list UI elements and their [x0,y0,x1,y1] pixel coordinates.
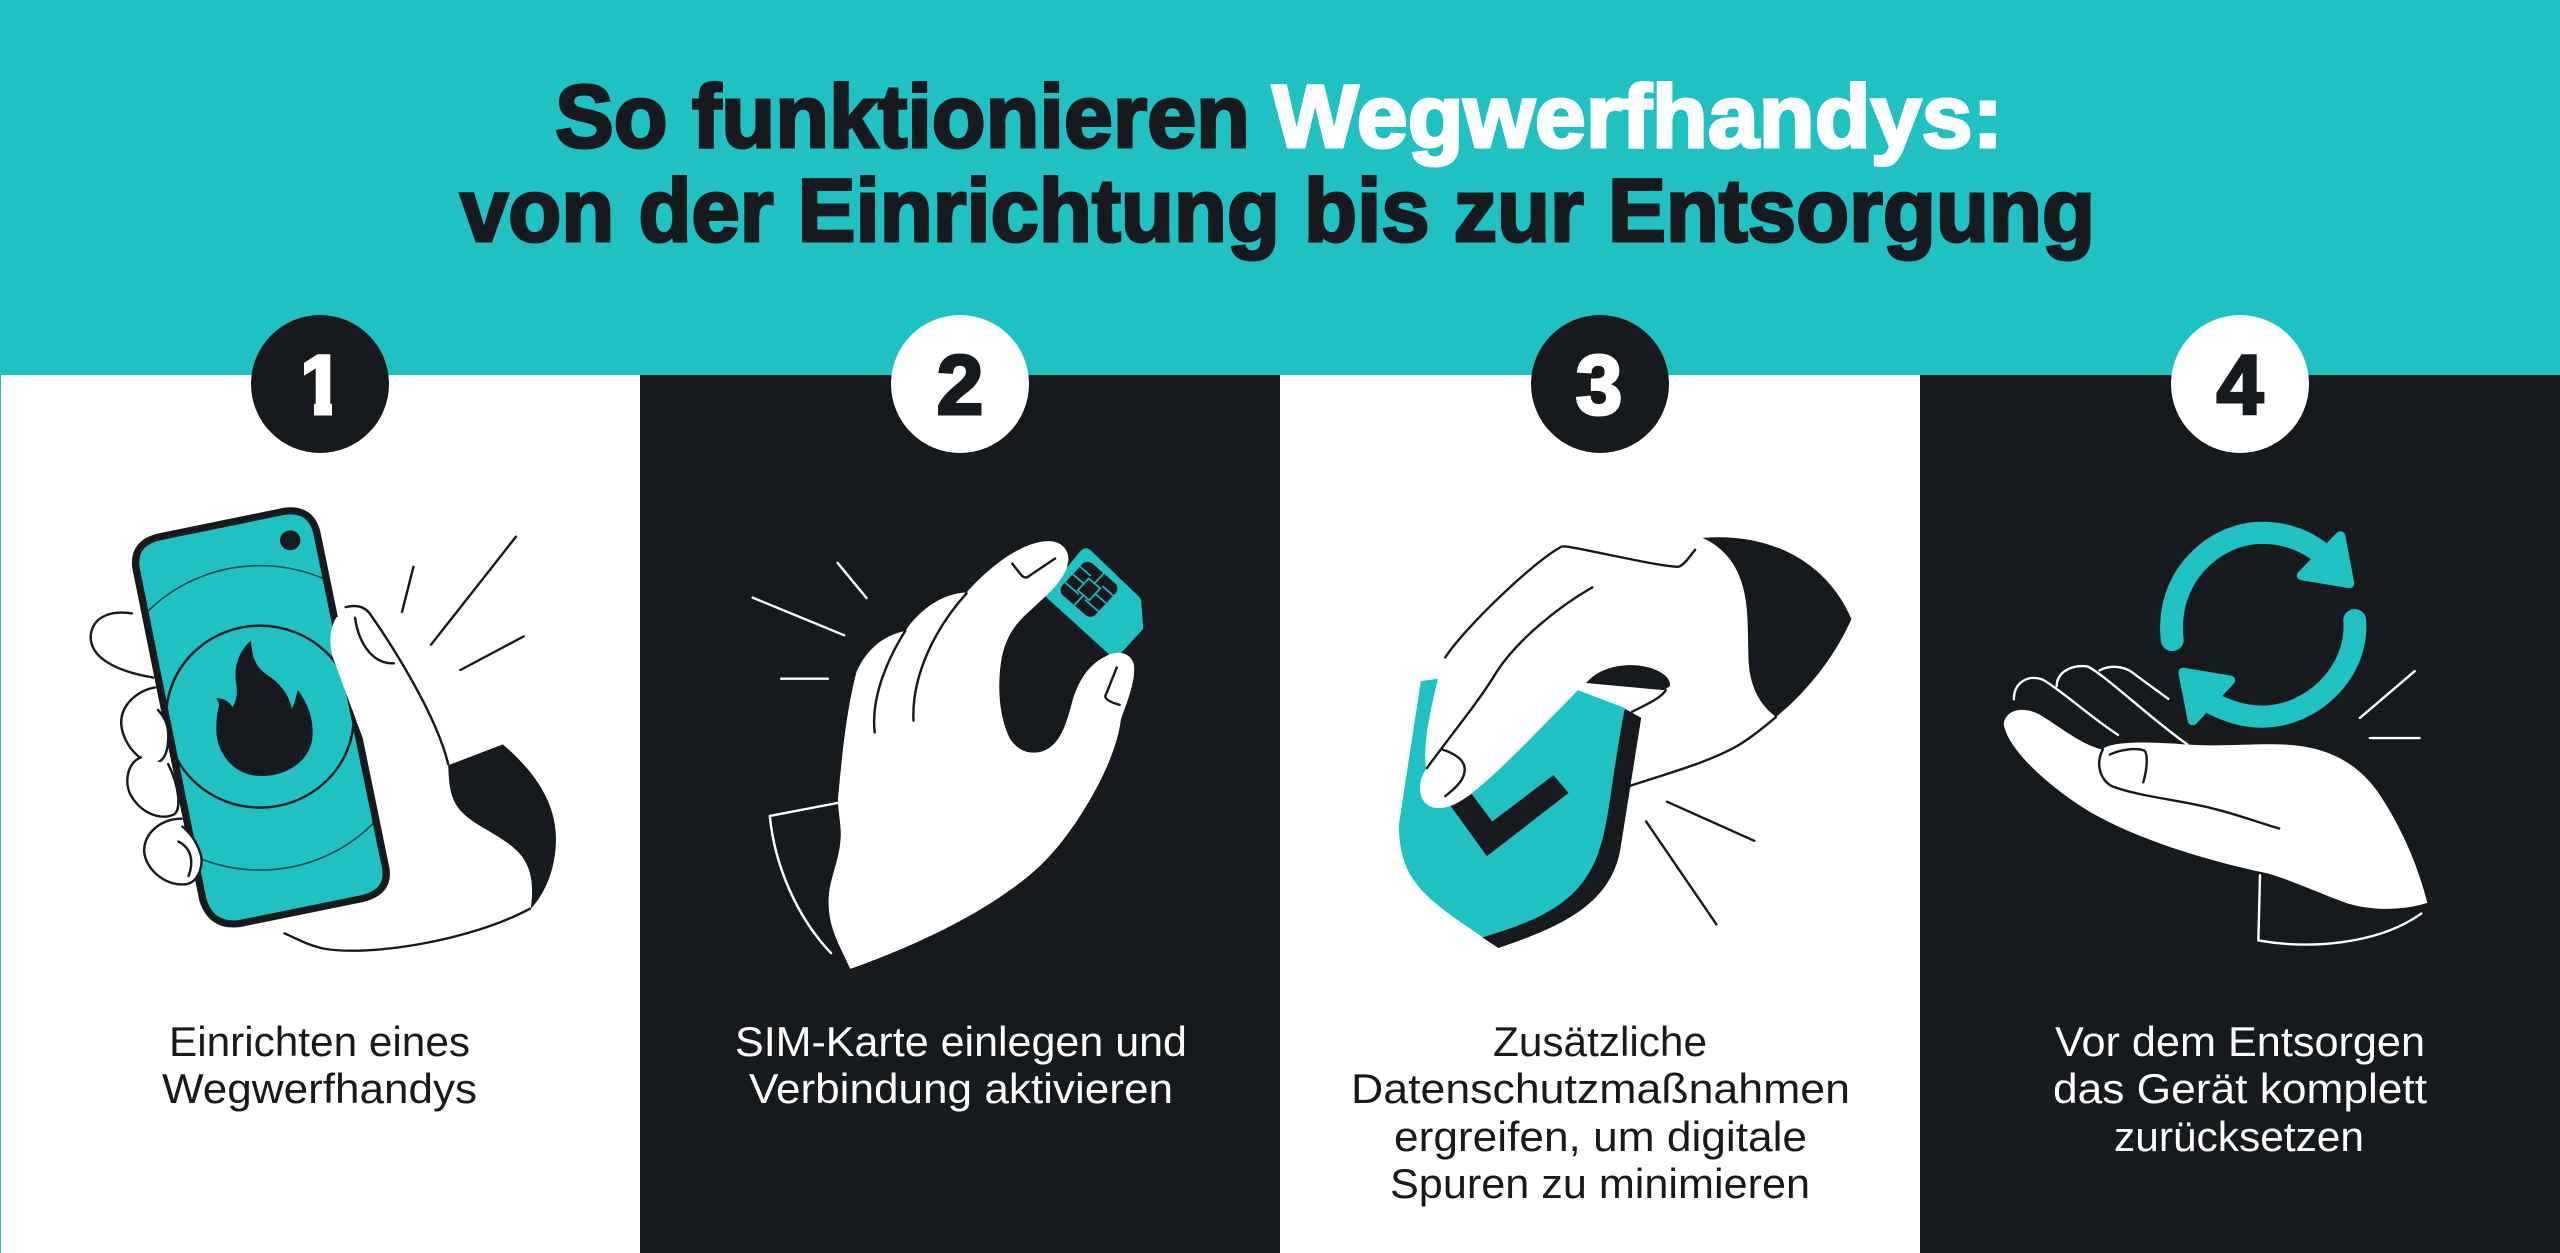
sleeve [448,744,556,909]
header band [0,0,2560,375]
caption 3: Zusätzliche [1493,1018,1707,1065]
hand [1420,546,1776,808]
caption 3: Datenschutzmaßnahmen [1351,1065,1850,1112]
illustration: hand holding phone with flame [91,511,556,951]
title: von der Einrichtung bis zur Entsorgung [460,160,2095,260]
caption 2: Verbindung aktivieren [749,1065,1173,1112]
action lines [1646,802,1754,924]
panel 2: insert SIM card [640,315,1280,1253]
caption 4: zurücksetzen [2114,1113,2364,1160]
fingers [2014,666,2187,744]
title: Wegwerfhandys: [1272,66,2003,166]
thumb lines [2099,749,2279,829]
panel 4: factory reset [1920,315,2560,1253]
illustration: hand with shield [1399,537,1851,948]
action lines [2360,671,2420,738]
sleeve [1702,537,1851,717]
SIM card [1044,548,1143,655]
step number 1: 1 [298,338,344,432]
step number 2 [891,315,1029,453]
title: So funktionieren [555,66,1250,166]
caption 3: ergreifen, um digitale [1394,1113,1807,1160]
step number 3: 3 [1576,338,1622,432]
shield [1399,679,1641,948]
caption 1: Wegwerfhandys [162,1065,477,1112]
illustration: hand with reset arrows [2004,533,2427,944]
panel 1: set up phone [0,315,556,1253]
caption 3 [1351,1018,1850,1207]
hand [2004,710,2427,909]
title [460,66,2095,260]
caption 4: Vor dem Entsorgen [2055,1018,2425,1065]
illustration: hand holding SIM card [753,541,1143,969]
step number 3 [1531,315,1669,453]
check mark [1451,775,1569,856]
hand [91,606,530,951]
step number 1 [251,315,389,453]
hand [829,541,1134,969]
caption 3: Spuren zu minimieren [1390,1160,1810,1207]
panel 3: privacy measures [1280,315,1920,1253]
finger lines [874,558,1120,732]
step number 4 [2171,315,2309,453]
caption 1: Einrichten eines [169,1018,470,1065]
icon: flame [216,641,313,776]
cuff [770,803,838,953]
step number 4: 4 [2217,338,2264,432]
caption 2: SIM-Karte einlegen und [735,1018,1187,1065]
phone [132,507,390,928]
icon: reset arrows [2172,533,2355,721]
action lines [402,537,524,670]
caption 4 [2053,1018,2427,1160]
step number 2: 2 [937,338,983,432]
caption 2 [735,1018,1187,1112]
caption 1 [162,1018,477,1112]
caption 4: das Gerät komplett [2053,1065,2427,1112]
action lines [753,563,867,679]
cuff [2258,875,2421,944]
